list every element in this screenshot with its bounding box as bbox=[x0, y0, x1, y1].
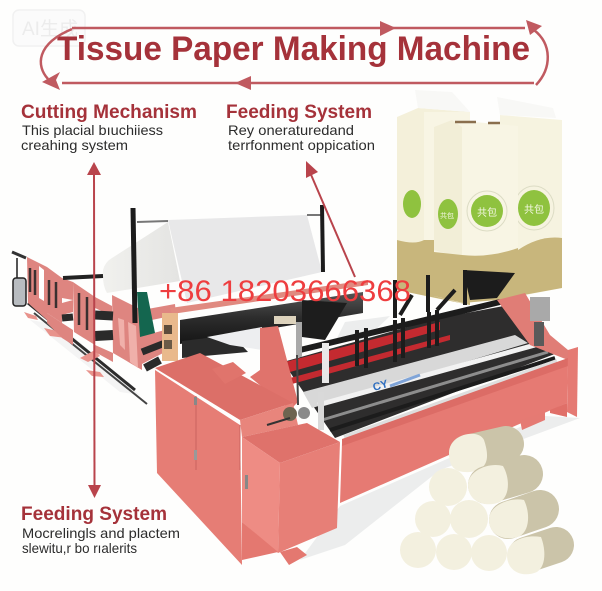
text block: cutting mechanism bbox=[21, 102, 197, 153]
third row rolls bbox=[415, 499, 540, 538]
second row rolls bbox=[429, 465, 524, 506]
back right pack bbox=[497, 97, 562, 300]
text block: cutting mechanism: Cutting Mechanism bbox=[21, 102, 197, 123]
text block: feeding system bottom bbox=[21, 504, 180, 556]
text block: feeding system bottom: slewitu,r bo rıalerits bbox=[22, 540, 137, 556]
back left pack bbox=[397, 90, 470, 305]
watermark bbox=[13, 10, 85, 46]
title: Tissue Paper Making Machine bbox=[57, 30, 530, 68]
base rail bbox=[24, 303, 147, 404]
side plate with sensor bbox=[250, 316, 329, 430]
paper parent roll bbox=[63, 222, 180, 293]
pink bar over roller bbox=[170, 280, 368, 314]
beige controller bbox=[162, 313, 178, 361]
roller bed bbox=[283, 302, 560, 438]
diagonal arrow bbox=[306, 161, 355, 277]
back frame windows and crossbars bbox=[30, 266, 165, 368]
right end frame bbox=[497, 293, 568, 360]
bottom row rolls bbox=[400, 532, 556, 574]
text block: cutting mechanism: creahing system bbox=[21, 137, 128, 153]
back black posts bbox=[133, 205, 323, 323]
text block: cutting mechanism: This placial bıuchiiess bbox=[22, 122, 163, 138]
front pack: 共包 bbox=[524, 203, 544, 216]
title arrows frame bbox=[41, 20, 548, 90]
roller bed: CY bbox=[372, 378, 390, 394]
front pack: 共包 bbox=[477, 206, 497, 219]
machine feet bbox=[242, 522, 307, 565]
machine bbox=[12, 205, 580, 565]
product: tissue packs bbox=[397, 90, 562, 305]
text block: feeding system top: Feeding System bbox=[226, 102, 372, 123]
top long roll bbox=[449, 434, 506, 472]
black rollers and conveyor bbox=[180, 292, 390, 358]
paper sheet bbox=[168, 215, 322, 303]
main cabinet bbox=[155, 353, 298, 565]
floor shadow bbox=[300, 416, 580, 560]
text block: feeding system top: Rey oneraturedand bbox=[228, 122, 354, 138]
back frame plates bbox=[27, 257, 176, 370]
vertical double arrow bbox=[87, 162, 101, 498]
roller wheel bbox=[283, 407, 310, 421]
long base beam bbox=[340, 347, 578, 503]
front pack: 共包 bbox=[440, 211, 454, 220]
text block: feeding system top: terrfonment oppication bbox=[228, 137, 375, 153]
watermark: AI生成 bbox=[22, 18, 78, 40]
front pack bbox=[434, 120, 544, 303]
text block: feeding system top bbox=[226, 102, 375, 153]
green panel bbox=[137, 292, 155, 337]
text block: feeding system bottom: Mocrelingls and plactem bbox=[22, 525, 180, 541]
left cylinder bbox=[12, 252, 26, 306]
tissue rolls bbox=[400, 434, 556, 574]
lower box bbox=[242, 418, 340, 553]
phone number overlay: +86 18203666368 bbox=[159, 275, 411, 308]
black top beam with prongs bbox=[300, 270, 515, 368]
text block: feeding system bottom: Feeding System bbox=[21, 504, 167, 525]
